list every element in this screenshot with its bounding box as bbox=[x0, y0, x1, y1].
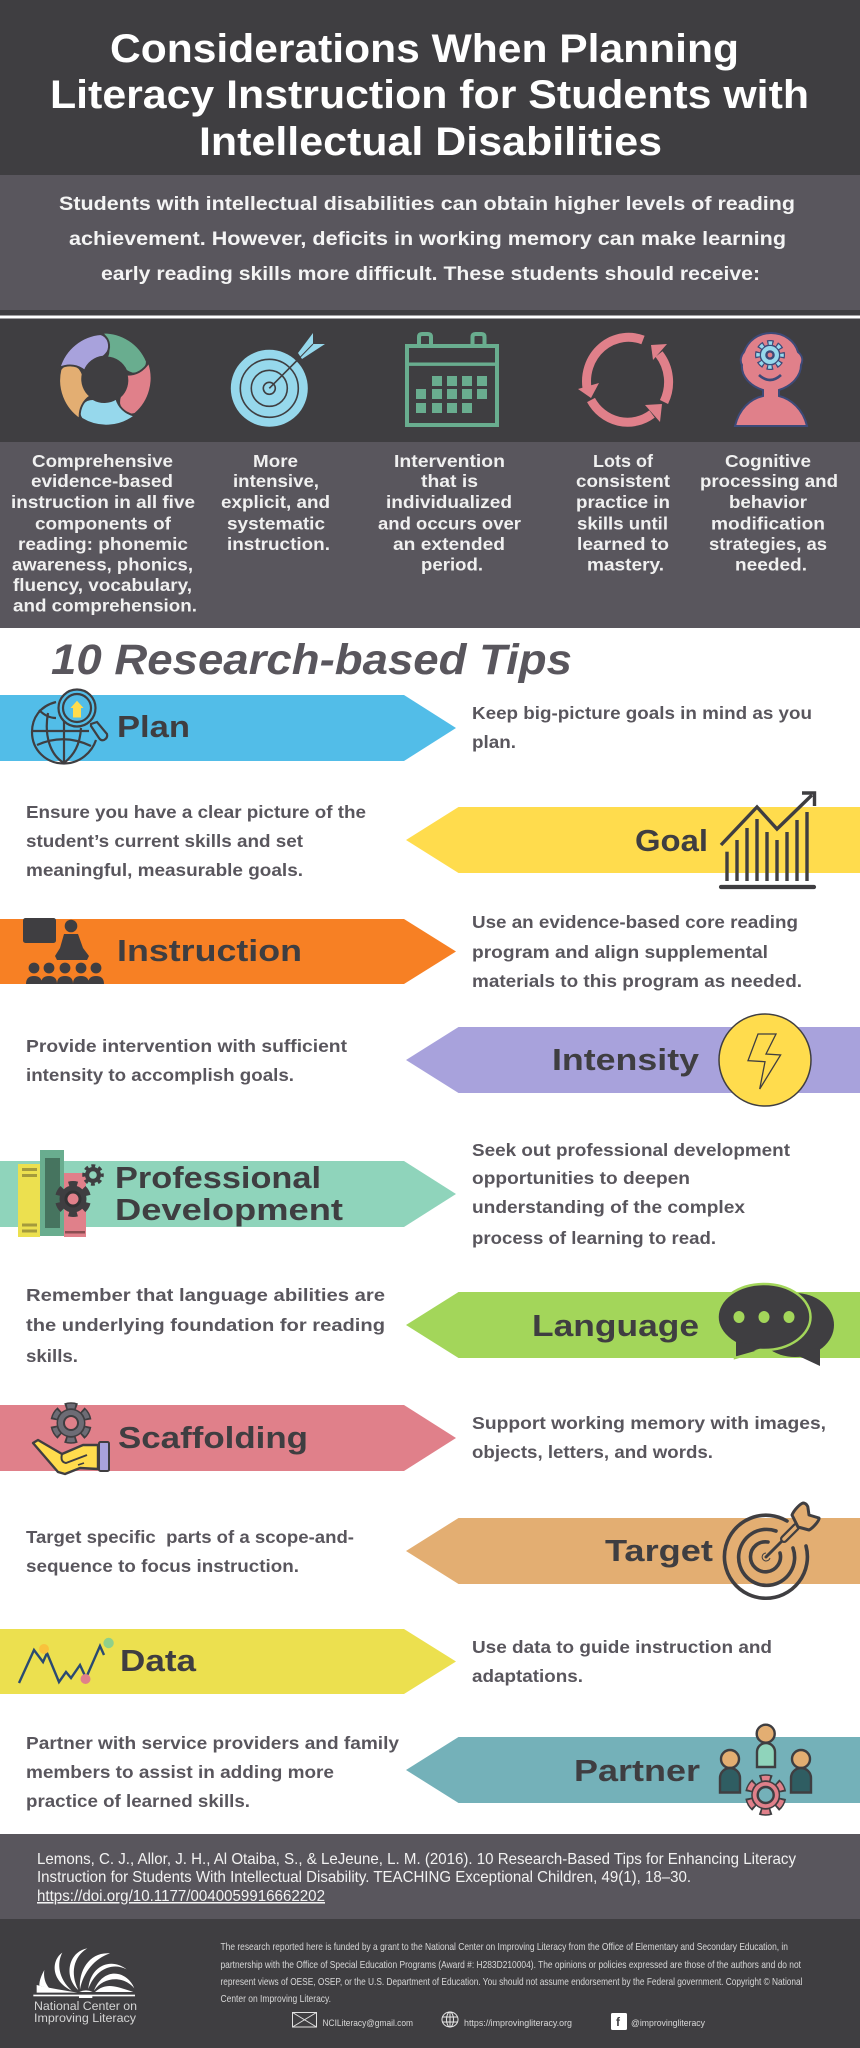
description: the underlying foundation for reading bbox=[26, 1315, 385, 1335]
citation text: https://doi.org/10.1177/0040059916662202 bbox=[37, 1888, 325, 1905]
tip: professional development bbox=[0, 1140, 790, 1248]
title: Considerations When Planning bbox=[110, 27, 739, 71]
text: comprehensive instruction: evidence-based bbox=[31, 471, 173, 491]
text: cognitive processing: modification bbox=[711, 514, 825, 534]
icon: globe with magnifier bbox=[32, 690, 107, 764]
description: members to assist in adding more bbox=[26, 1762, 334, 1782]
description: Support working memory with images, bbox=[472, 1413, 826, 1433]
citation text: Instruction for Students With Intellectual Disability. TEACHING Exceptional Children, 49(1), 18–30. bbox=[37, 1869, 691, 1886]
description bbox=[26, 1527, 354, 1576]
label: Language bbox=[532, 1308, 699, 1343]
description: Seek out professional development bbox=[472, 1140, 790, 1160]
label: Intensity bbox=[552, 1042, 700, 1077]
icon: lightning bolt in circle bbox=[719, 1014, 811, 1106]
description: Provide intervention with sufficient bbox=[26, 1036, 347, 1056]
label: Partner bbox=[574, 1753, 700, 1788]
intro text: Students with intellectual disabilities can obtain higher levels of reading bbox=[59, 193, 795, 215]
description: practice of learned skills. bbox=[26, 1791, 250, 1811]
footer panel bbox=[0, 1919, 860, 2048]
funding statement: Center on Improving Literacy. bbox=[220, 1994, 331, 2005]
tip: instruction bbox=[0, 912, 802, 991]
tip: target bbox=[26, 1503, 860, 1598]
description: intensity to accomplish goals. bbox=[26, 1065, 294, 1085]
title: Literacy Instruction for Students with bbox=[50, 73, 809, 117]
description: Use data to guide instruction and bbox=[472, 1637, 772, 1657]
title: Intellectual Disabilities bbox=[199, 120, 662, 164]
label: Instruction bbox=[117, 933, 302, 968]
logo: National Center on Improving Literacy bbox=[33, 1948, 137, 2025]
description: Remember that language abilities are bbox=[26, 1285, 385, 1305]
tip: scaffolding bbox=[0, 1405, 826, 1474]
icon: head with gear bbox=[735, 333, 807, 426]
description: Keep big-picture goals in mind as you bbox=[472, 703, 812, 723]
contact: facebook bbox=[611, 2013, 705, 2030]
icon: speech bubbles bbox=[718, 1284, 834, 1366]
description: adaptations. bbox=[472, 1666, 583, 1686]
description: opportunities to deepen bbox=[472, 1168, 690, 1188]
description: student’s current skills and set bbox=[26, 831, 303, 851]
icon: data line chart bbox=[19, 1638, 114, 1684]
text: more intensive instruction: More bbox=[253, 451, 298, 471]
logo: National Center on Improving Literacy: National Center on bbox=[34, 1999, 137, 2013]
icon: books and gears bbox=[18, 1150, 102, 1237]
label: Development bbox=[115, 1192, 343, 1227]
text: consistent practice: learned to bbox=[577, 534, 669, 554]
intro text: early reading skills more difficult. These students should receive: bbox=[101, 263, 760, 285]
funding statement bbox=[220, 1942, 802, 2005]
text: comprehensive instruction: awareness, phonics, bbox=[12, 554, 193, 574]
text: cognitive processing: processing and bbox=[700, 471, 838, 491]
description: meaningful, measurable goals. bbox=[26, 860, 303, 880]
text: more intensive instruction: instruction. bbox=[227, 534, 330, 554]
description bbox=[26, 1285, 385, 1366]
label: Goal bbox=[635, 823, 708, 858]
description bbox=[472, 912, 802, 991]
text: cognitive processing: Cognitive bbox=[725, 451, 811, 471]
text: cognitive processing: needed. bbox=[735, 554, 807, 574]
description bbox=[472, 1140, 790, 1248]
header panel bbox=[0, 0, 860, 175]
icon: rising bar chart bbox=[721, 793, 814, 887]
description: plan. bbox=[472, 732, 516, 752]
citation panel bbox=[0, 1834, 860, 1919]
icon: hand holding gear bbox=[33, 1406, 109, 1474]
text: consistent practice: mastery. bbox=[587, 554, 664, 574]
label: Data bbox=[120, 1643, 197, 1678]
text: individualized intervention: an extended bbox=[393, 534, 505, 554]
text: comprehensive instruction: instruction in all five bbox=[11, 492, 195, 512]
contact: website bbox=[442, 2012, 572, 2029]
intro panel bbox=[0, 175, 860, 316]
title bbox=[50, 27, 809, 164]
logo: National Center on Improving Literacy: Improving Literacy bbox=[34, 2011, 137, 2025]
tip: language bbox=[26, 1284, 860, 1366]
panel: five recommendations bbox=[0, 318, 860, 628]
description: Partner with service providers and family bbox=[26, 1733, 399, 1753]
text: comprehensive instruction: Comprehensive bbox=[32, 451, 173, 471]
text: individualized intervention bbox=[378, 451, 521, 574]
text: cognitive processing: strategies, as bbox=[709, 534, 827, 554]
label: Target bbox=[605, 1533, 713, 1568]
contact: website: https://improvingliteracy.org bbox=[464, 2018, 572, 2029]
text: individualized intervention: period. bbox=[421, 554, 483, 574]
contact: facebook: f bbox=[616, 2015, 621, 2029]
text: consistent practice: practice in bbox=[576, 492, 670, 512]
icon: dart on target bbox=[724, 1503, 819, 1598]
text: individualized intervention: individualized bbox=[386, 492, 512, 512]
text: consistent practice bbox=[576, 451, 670, 574]
intro text: achievement. However, deficits in working memory can make learning bbox=[69, 228, 786, 250]
text: consistent practice: Lots of bbox=[593, 451, 653, 471]
label: Scaffolding bbox=[118, 1420, 308, 1455]
description: sequence to focus instruction. bbox=[26, 1556, 299, 1576]
icon: practice cycle arrows bbox=[578, 337, 669, 422]
text: comprehensive instruction: components of bbox=[35, 514, 171, 534]
text: individualized intervention: Intervention bbox=[394, 451, 505, 471]
tip: data bbox=[0, 1629, 772, 1694]
description: Target specific parts of a scope-and- bbox=[26, 1527, 354, 1547]
icon: five-part wheel bbox=[43, 325, 163, 442]
text: comprehensive instruction: fluency, vocabulary, bbox=[13, 575, 192, 595]
description bbox=[472, 703, 812, 752]
text: individualized intervention: and occurs over bbox=[378, 514, 521, 534]
contact: email: NCILiteracy@gmail.com bbox=[322, 2018, 413, 2029]
label: Plan bbox=[117, 709, 190, 744]
citation text bbox=[37, 1851, 796, 1905]
description: skills. bbox=[26, 1346, 78, 1366]
text: more intensive instruction: systematic bbox=[227, 514, 325, 534]
tip: plan bbox=[0, 690, 812, 764]
text: individualized intervention: that is bbox=[421, 471, 478, 491]
text: more intensive instruction bbox=[221, 451, 330, 554]
description: understanding of the complex bbox=[472, 1197, 745, 1217]
tip: intensity bbox=[26, 1014, 860, 1106]
icon: target with arrow bbox=[231, 333, 325, 427]
description: Use an evidence-based core reading bbox=[472, 912, 798, 932]
label bbox=[115, 1160, 343, 1227]
text: cognitive processing: behavior bbox=[729, 492, 807, 512]
description: process of learning to read. bbox=[472, 1228, 716, 1248]
description: program and align supplemental bbox=[472, 942, 768, 962]
text: more intensive instruction: explicit, and bbox=[221, 492, 330, 512]
description: materials to this program as needed. bbox=[472, 971, 802, 991]
text: comprehensive instruction bbox=[11, 451, 197, 616]
description bbox=[472, 1637, 772, 1686]
description bbox=[26, 1036, 347, 1085]
text: cognitive processing bbox=[700, 451, 838, 574]
heading: 10 Research-based Tips: 10 Research-based Tips bbox=[51, 636, 572, 684]
description bbox=[26, 1733, 399, 1811]
description: objects, letters, and words. bbox=[472, 1442, 713, 1462]
tip: goal bbox=[26, 793, 860, 887]
text: more intensive instruction: intensive, bbox=[233, 471, 319, 491]
icon: teacher and class bbox=[23, 918, 104, 984]
text: consistent practice: consistent bbox=[576, 471, 670, 491]
label: Professional bbox=[115, 1160, 321, 1195]
contact: facebook: @improvingliteracy bbox=[631, 2018, 705, 2029]
contact: email bbox=[292, 2012, 413, 2029]
text: comprehensive instruction: reading: phonemic bbox=[18, 534, 188, 554]
description bbox=[472, 1413, 826, 1462]
description bbox=[26, 802, 366, 880]
citation text: Lemons, C. J., Allor, J. H., Al Otaiba, S., & LeJeune, L. M. (2016). 10 Research-Based Tips for Enhancing Literacy bbox=[37, 1851, 796, 1868]
icon: calendar bbox=[405, 334, 499, 425]
intro text bbox=[59, 193, 795, 285]
tip: partner bbox=[26, 1725, 860, 1812]
icon: people and gear bbox=[720, 1725, 811, 1812]
description: Ensure you have a clear picture of the bbox=[26, 802, 366, 822]
text: comprehensive instruction: and comprehension. bbox=[13, 596, 197, 616]
text: consistent practice: skills until bbox=[577, 514, 668, 534]
